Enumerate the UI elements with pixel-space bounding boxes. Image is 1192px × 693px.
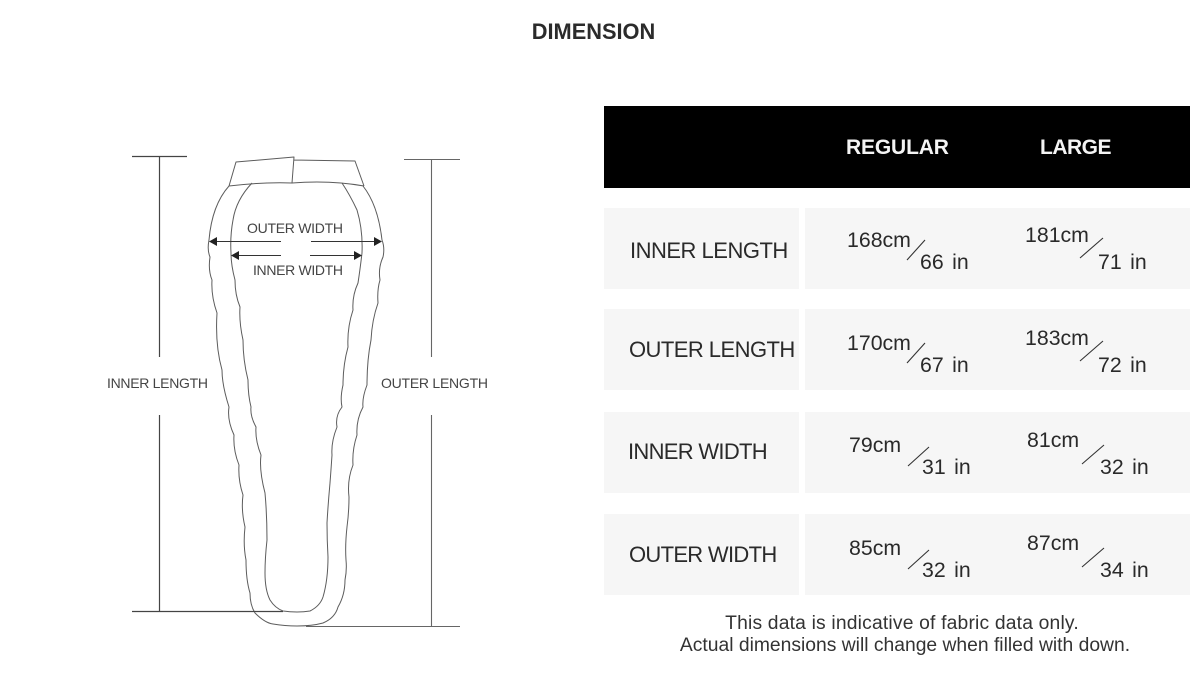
- values cell: 72 in: [1098, 353, 1147, 377]
- outer length dimension line: [306, 160, 460, 626]
- row: inner length: [604, 208, 1190, 289]
- values cell: 181cm: [1025, 223, 1089, 247]
- title: DIMENSION: [532, 19, 655, 44]
- row label cell: [604, 309, 799, 390]
- values cell: 32 in: [922, 558, 971, 582]
- header: large: LARGE: [1040, 136, 1111, 159]
- inner length dimension line: [132, 156, 283, 612]
- row label cell: OUTER LENGTH: [629, 337, 795, 362]
- values cell: 79cm: [849, 433, 901, 457]
- values cell: [805, 412, 1190, 493]
- row: inner width: [604, 412, 1190, 493]
- inner width arrow: [231, 251, 362, 260]
- label: inner width: INNER WIDTH: [253, 262, 343, 278]
- row label cell: [604, 208, 799, 289]
- outer width arrow: [209, 237, 382, 246]
- values cell: 31 in: [922, 455, 971, 479]
- row: outer width: [604, 514, 1190, 595]
- label: inner length: INNER LENGTH: [107, 375, 208, 391]
- label: outer width: OUTER WIDTH: [247, 220, 343, 236]
- row label cell: OUTER WIDTH: [629, 542, 777, 567]
- values cell: 71 in: [1098, 250, 1147, 274]
- label: outer length: OUTER LENGTH: [381, 375, 488, 391]
- values cell: 34 in: [1100, 558, 1149, 582]
- values cell: 170cm: [847, 331, 911, 355]
- values cell: 85cm: [849, 536, 901, 560]
- header: regular: REGULAR: [846, 136, 949, 159]
- sleeping bag outline: [208, 157, 384, 626]
- values cell: [805, 208, 1190, 289]
- values cell: 81cm: [1027, 428, 1079, 452]
- values cell: 67 in: [920, 353, 969, 377]
- row label cell: INNER LENGTH: [630, 238, 788, 263]
- footnote: [680, 613, 1130, 656]
- values cell: 183cm: [1025, 326, 1089, 350]
- row label cell: INNER WIDTH: [628, 439, 767, 464]
- footnote: Actual dimensions will change when filled with down.: [680, 635, 1130, 656]
- table header: [604, 106, 1190, 188]
- row label cell: [604, 514, 799, 595]
- values cell: 87cm: [1027, 531, 1079, 555]
- diagram: sleeping bag dimensions: [107, 156, 488, 627]
- values cell: 168cm: [847, 228, 911, 252]
- row: outer length: [604, 309, 1190, 390]
- values cell: 66 in: [920, 250, 969, 274]
- row label cell: [604, 412, 799, 493]
- values cell: [805, 514, 1190, 595]
- values cell: 32 in: [1100, 455, 1149, 479]
- values cell: [805, 309, 1190, 390]
- footnote: This data is indicative of fabric data only.: [725, 613, 1079, 634]
